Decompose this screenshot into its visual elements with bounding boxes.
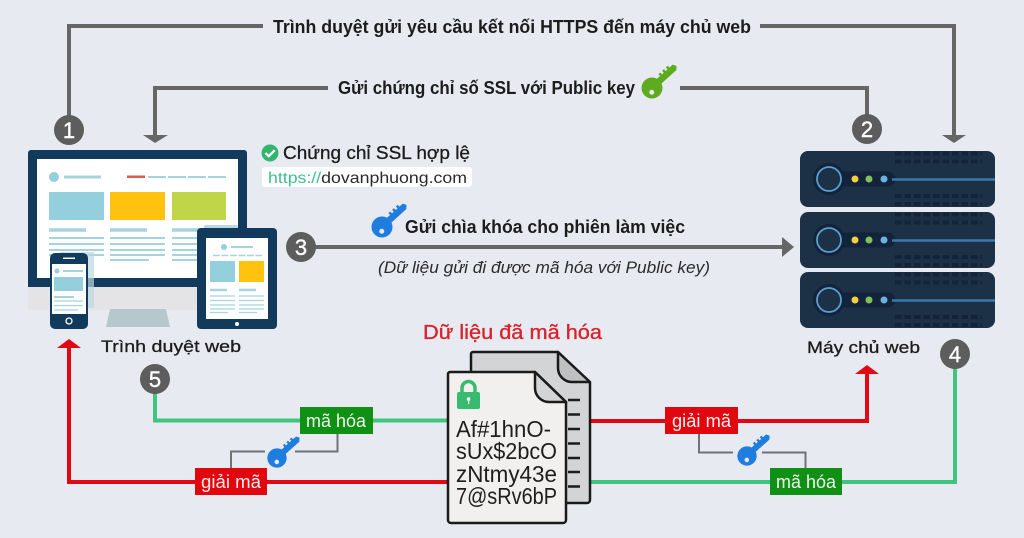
badge: left encrypt: mã hóa bbox=[306, 411, 367, 431]
server 3 bbox=[800, 272, 995, 328]
text: certificate valid: Chứng chỉ SSL hợp lệ bbox=[283, 143, 470, 163]
heading: encrypted data: Dữ liệu đã mã hóa bbox=[423, 322, 603, 344]
server 1 bbox=[800, 151, 995, 207]
icon: server stack bbox=[800, 151, 995, 328]
step badge 3: 3 bbox=[295, 235, 307, 260]
step badge 2: 2 bbox=[861, 117, 873, 142]
text: ciphertext: 7@sRv6bP bbox=[456, 483, 557, 509]
icon: padlock bbox=[457, 382, 480, 409]
back page bbox=[471, 352, 590, 503]
text: step 3 note: (Dữ liệu gửi đi được mã hóa với Public key) bbox=[378, 258, 710, 277]
arrow: left red decrypt line bbox=[57, 339, 452, 482]
icon: green key bbox=[637, 58, 684, 103]
icon: browser devices bbox=[28, 150, 277, 329]
badge: left encrypt bbox=[300, 407, 373, 434]
arrow: step 1 request to server bbox=[69, 26, 966, 143]
heading: step 1 text: Trình duyệt gửi yêu cầu kết nối HTTPS đến máy chủ web bbox=[273, 17, 751, 37]
badge: right decrypt bbox=[665, 407, 738, 434]
server 2 bbox=[800, 212, 995, 268]
arrow: right green encrypt line bbox=[588, 365, 955, 482]
icon: check badge bbox=[262, 144, 278, 162]
badge: right encrypt bbox=[770, 468, 842, 495]
text: ciphertext bbox=[456, 416, 557, 509]
monitor bbox=[28, 150, 247, 327]
icon: blue key bbox=[367, 197, 414, 242]
badge: right encrypt: mã hóa bbox=[776, 472, 837, 492]
arrow: step 2 certificate to browser bbox=[143, 88, 867, 143]
step badge 4: 4 bbox=[949, 342, 961, 367]
icon: left small key bbox=[263, 431, 306, 472]
url box: https:// dovanphuong.com bbox=[268, 170, 467, 187]
icon: right small key bbox=[733, 429, 776, 470]
label: server: Máy chủ web bbox=[807, 338, 920, 357]
badge: right decrypt: giải mã bbox=[672, 411, 732, 431]
heading: step 3 text: Gửi chìa khóa cho phiên làm việc bbox=[405, 217, 685, 237]
step badge 1: 1 bbox=[63, 118, 75, 143]
badge: left decrypt: giải mã bbox=[201, 472, 262, 492]
step badge 5 bbox=[140, 364, 170, 394]
icon: encrypted document bbox=[448, 352, 590, 523]
text: ciphertext: zNtmy43e bbox=[456, 461, 557, 487]
connector: right key link bbox=[699, 434, 806, 468]
arrow: right red decrypt line bbox=[588, 365, 879, 421]
step badge 5: 5 bbox=[149, 367, 161, 392]
arrow: left green encrypt line bbox=[155, 390, 452, 420]
step badge 4 bbox=[940, 339, 970, 369]
label: browser: Trình duyệt web bbox=[101, 337, 241, 356]
step badge 1 bbox=[54, 115, 84, 145]
heading: step 2 text: Gửi chứng chỉ số SSL với Public key bbox=[338, 78, 635, 98]
tablet bbox=[197, 225, 277, 329]
badge: left decrypt bbox=[195, 468, 267, 495]
phone bbox=[50, 252, 94, 329]
panel: SSL certificate status bbox=[262, 143, 472, 187]
front page bbox=[448, 372, 566, 523]
step badge 3 bbox=[286, 232, 316, 262]
text: ciphertext: sUx$2bcO bbox=[456, 438, 557, 464]
arrow: step 3 session key bbox=[310, 237, 794, 257]
step badge 2 bbox=[852, 114, 882, 144]
text: ciphertext: Af#1hnO- bbox=[456, 416, 551, 442]
connector: left key link bbox=[231, 434, 338, 468]
